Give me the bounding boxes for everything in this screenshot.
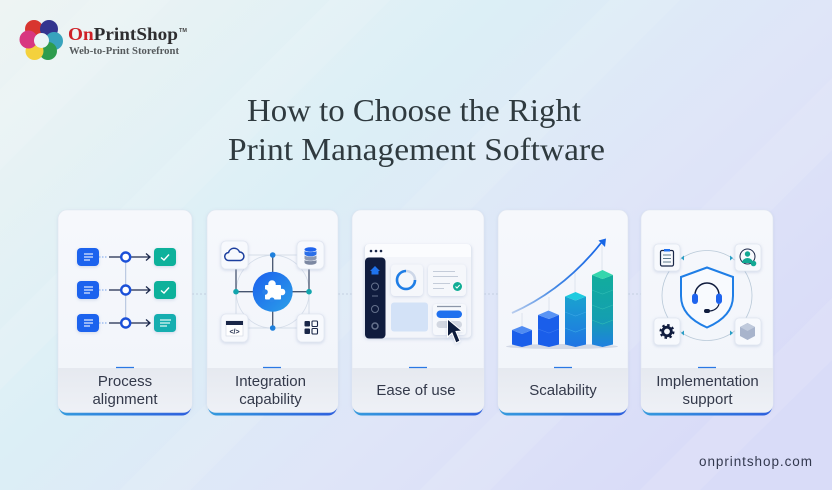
checklist tile [654, 244, 680, 271]
process flow icon [77, 248, 176, 332]
label: Scalability [529, 382, 597, 399]
title: Print Management Software [228, 131, 605, 167]
label: Ease of use [376, 382, 456, 399]
label: support [682, 391, 733, 408]
label [656, 373, 759, 408]
label [92, 373, 158, 408]
logo mark [20, 20, 63, 60]
label: Process [98, 373, 152, 390]
panel: implementation support [641, 210, 773, 416]
label: alignment [92, 391, 158, 408]
label: capability [239, 391, 302, 408]
list tile [428, 264, 466, 296]
dashboard icon [364, 244, 472, 343]
shield with headset [681, 268, 733, 328]
bar 4 [592, 270, 613, 347]
logo wordmark: OnPrintShop [68, 24, 178, 44]
database tile [297, 241, 324, 269]
blue panel [391, 302, 428, 332]
button tile [433, 304, 466, 335]
logo tagline: Web-to-Print Storefront [69, 46, 180, 57]
support cycle icon [654, 244, 761, 345]
user tile [735, 244, 761, 271]
label: Integration [235, 373, 306, 390]
donut tile [391, 264, 423, 296]
gear tile [654, 318, 680, 345]
title [228, 92, 605, 167]
widgets tile [297, 314, 324, 342]
label [235, 373, 306, 408]
sidebar [365, 258, 386, 338]
package tile [735, 318, 761, 345]
bar 2 [538, 310, 559, 347]
title: How to Choose the Right [247, 92, 581, 128]
bar chart [506, 238, 618, 349]
trademark: TM [179, 28, 187, 34]
label: Implementation [656, 373, 759, 390]
integration hub icon [221, 241, 324, 342]
logo [20, 20, 187, 60]
bar 3 [565, 292, 586, 347]
cloud tile [221, 241, 248, 269]
bar 1 [512, 326, 532, 347]
puzzle hub [253, 272, 293, 312]
code tile: </> [229, 329, 240, 336]
panel: scalability [498, 210, 628, 416]
panel: integration capability [207, 210, 338, 416]
connectors [192, 293, 641, 295]
panel: process alignment [58, 210, 192, 416]
growth arrow [512, 238, 606, 313]
cursor [448, 319, 462, 343]
panel: ease of use [352, 210, 484, 416]
website url: onprintshop.com [699, 454, 812, 469]
